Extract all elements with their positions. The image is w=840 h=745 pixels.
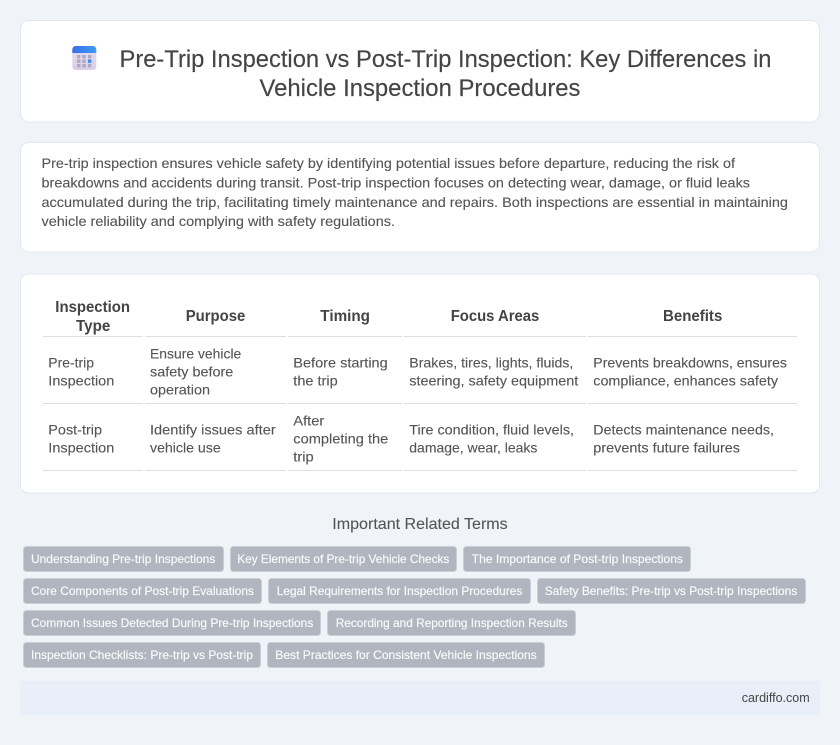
title bbox=[120, 46, 772, 102]
table row: pre-trip: compliance, enhances safety bbox=[593, 372, 778, 388]
table row: pre-trip: Before starting bbox=[293, 354, 388, 370]
panel: comparison table bbox=[20, 274, 820, 493]
table row: post-trip: completing the bbox=[293, 430, 389, 446]
text block: description: Pre-trip inspection ensures vehicle safety by identifying potential issues before departure, reducing the risk of bbox=[42, 155, 735, 171]
icon: calendar bbox=[72, 46, 96, 70]
table row: pre-trip: Ensure vehicle bbox=[150, 345, 242, 361]
table row: pre-trip bbox=[43, 345, 797, 404]
table row: pre-trip: Inspection bbox=[48, 372, 114, 388]
table row: pre-trip: operation bbox=[150, 381, 210, 397]
table row: post-trip: damage, wear, leaks bbox=[409, 439, 537, 455]
table header row bbox=[43, 299, 797, 337]
table row: pre-trip: safety before bbox=[150, 363, 234, 379]
title: Pre-Trip Inspection vs Post-Trip Inspection: Key Differences in bbox=[120, 46, 772, 73]
table row: pre-trip: the trip bbox=[293, 372, 338, 388]
table row: pre-trip: steering, safety equipment bbox=[409, 372, 578, 388]
related terms tags: The Importance of Post-trip Inspections bbox=[472, 552, 683, 566]
panel: description bbox=[20, 142, 820, 252]
heading: important related terms: Important Related Terms bbox=[332, 516, 508, 533]
table row: post-trip: Inspection bbox=[48, 439, 114, 455]
title: Vehicle Inspection Procedures bbox=[260, 75, 580, 102]
footer bbox=[20, 681, 820, 715]
related terms tags: Recording and Reporting Inspection Results bbox=[336, 616, 568, 630]
table row: post-trip: vehicle use bbox=[150, 439, 221, 455]
text block: description bbox=[42, 155, 788, 229]
related terms tags: Inspection Checklists: Pre-trip vs Post-trip bbox=[31, 648, 253, 662]
table row: post-trip: Identify issues after bbox=[150, 421, 276, 437]
text block: description: vehicle reliability and complying with safety regulations. bbox=[42, 213, 395, 229]
table header row: Timing bbox=[320, 308, 370, 325]
related terms tags: Safety Benefits: Pre-trip vs Post-trip Inspections bbox=[545, 584, 797, 598]
table header row: Inspection bbox=[55, 299, 130, 316]
text block: description: breakdowns and accidents during transit. Post-trip inspection focuses on detecting wear, damage, or fluid leaks bbox=[42, 174, 750, 190]
text block: description: accumulated during the trip, facilitating timely maintenance and repairs. Both inspections are essential in maintaining bbox=[42, 194, 788, 210]
related terms tags: Key Elements of Pre-trip Vehicle Checks bbox=[237, 552, 449, 566]
footer: cardiffo.com bbox=[742, 690, 810, 705]
table row: post-trip: Detects maintenance needs, bbox=[593, 421, 774, 437]
table row: pre-trip: Prevents breakdowns, ensures bbox=[593, 354, 787, 370]
related terms tags: Legal Requirements for Inspection Procedures bbox=[277, 584, 522, 598]
table row: post-trip: Tire condition, fluid levels, bbox=[409, 421, 574, 437]
panel: header bbox=[20, 20, 820, 122]
table header row: Type bbox=[76, 318, 110, 335]
related terms tags: Best Practices for Consistent Vehicle Inspections bbox=[275, 648, 537, 662]
related terms tags: Core Components of Post-trip Evaluations bbox=[31, 584, 254, 598]
table row: post-trip: Post-trip bbox=[48, 421, 102, 437]
table header row: Focus Areas bbox=[451, 308, 539, 325]
related terms tags: Common Issues Detected During Pre-trip Inspections bbox=[31, 616, 313, 630]
related terms tags: Understanding Pre-trip Inspections bbox=[31, 552, 215, 566]
related terms tags bbox=[24, 546, 806, 668]
table row: pre-trip: Pre-trip bbox=[48, 354, 94, 370]
table row: post-trip: prevents future failures bbox=[593, 439, 740, 455]
table row: post-trip: trip bbox=[293, 448, 314, 464]
table row: post-trip bbox=[43, 412, 797, 471]
table row: pre-trip: Brakes, tires, lights, fluids, bbox=[409, 354, 573, 370]
table header row: Purpose bbox=[186, 308, 245, 325]
table header row: Benefits bbox=[663, 308, 722, 325]
table row: post-trip: After bbox=[293, 412, 325, 428]
